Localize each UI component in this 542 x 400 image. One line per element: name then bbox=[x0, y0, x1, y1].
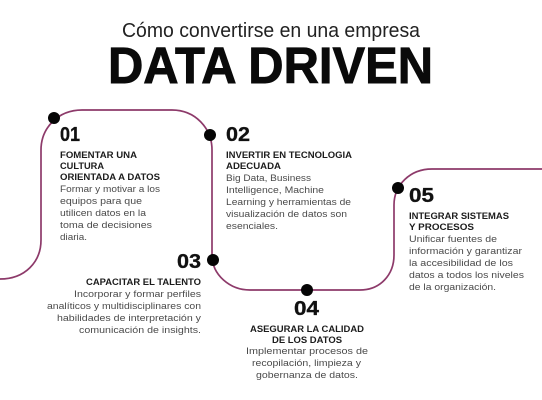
step 04: gobernanza de datos. bbox=[256, 370, 358, 381]
step 02: 02 bbox=[226, 124, 250, 146]
step 01: CULTURA bbox=[60, 161, 104, 171]
step 02 bbox=[226, 124, 352, 232]
step 03: habilidades de interpretación y bbox=[57, 313, 201, 324]
step 05: Y PROCESOS bbox=[409, 222, 474, 232]
step 04: DE LOS DATOS bbox=[272, 335, 342, 345]
step 02: Big Data, Business bbox=[226, 173, 311, 184]
step 04 bbox=[246, 298, 368, 381]
step 05: información y garantizar bbox=[409, 246, 523, 257]
step 01: utilicen datos en la bbox=[60, 208, 147, 219]
step 05: la accesibilidad de los bbox=[409, 258, 513, 269]
step 02: Intelligence, Machine bbox=[226, 185, 324, 196]
step 05: Unificar fuentes de bbox=[409, 234, 497, 245]
step 03: Incorporar y formar perfiles bbox=[74, 289, 201, 300]
step 03: CAPACITAR EL TALENTO bbox=[86, 277, 201, 287]
step 02: visualización de datos son bbox=[226, 209, 347, 220]
step 01: equipos para que bbox=[60, 196, 142, 207]
winding timeline path bbox=[0, 110, 542, 290]
step 01: diaria. bbox=[60, 232, 87, 243]
step 05: datos a todos los niveles bbox=[409, 270, 524, 281]
step 01: Formar y motivar a los bbox=[60, 184, 160, 195]
step 03 bbox=[47, 251, 201, 336]
step 05: INTEGRAR SISTEMAS bbox=[409, 211, 509, 221]
step 04: ASEGURAR LA CALIDAD bbox=[250, 324, 364, 334]
step 02: ADECUADA bbox=[226, 161, 281, 171]
timeline dots bbox=[48, 112, 404, 296]
step 03: 03 bbox=[177, 251, 201, 273]
title: Cómo convertirse en una empresa bbox=[122, 20, 421, 42]
step 04: recopilación, limpieza y bbox=[252, 358, 361, 369]
step 05: de la organización. bbox=[409, 282, 496, 293]
step 03: analíticos y multidisciplinares con bbox=[47, 301, 201, 312]
step 01: 01 bbox=[60, 124, 80, 146]
step 02: Learning y herramientas de bbox=[226, 197, 351, 208]
step 01: toma de decisiones bbox=[60, 220, 152, 231]
step 01: FOMENTAR UNA bbox=[60, 150, 137, 160]
step 04: Implementar procesos de bbox=[246, 346, 368, 357]
step 05 bbox=[409, 185, 524, 293]
step 05: 05 bbox=[409, 185, 434, 207]
step 01: ORIENTADA A DATOS bbox=[60, 172, 160, 182]
step 03: comunicación de insights. bbox=[79, 325, 201, 336]
step 04: 04 bbox=[294, 298, 320, 320]
title: DATA DRIVEN bbox=[108, 37, 433, 94]
step 01 bbox=[60, 124, 160, 243]
step 02: INVERTIR EN TECNOLOGIA bbox=[226, 150, 352, 160]
step 02: esenciales. bbox=[226, 221, 278, 232]
